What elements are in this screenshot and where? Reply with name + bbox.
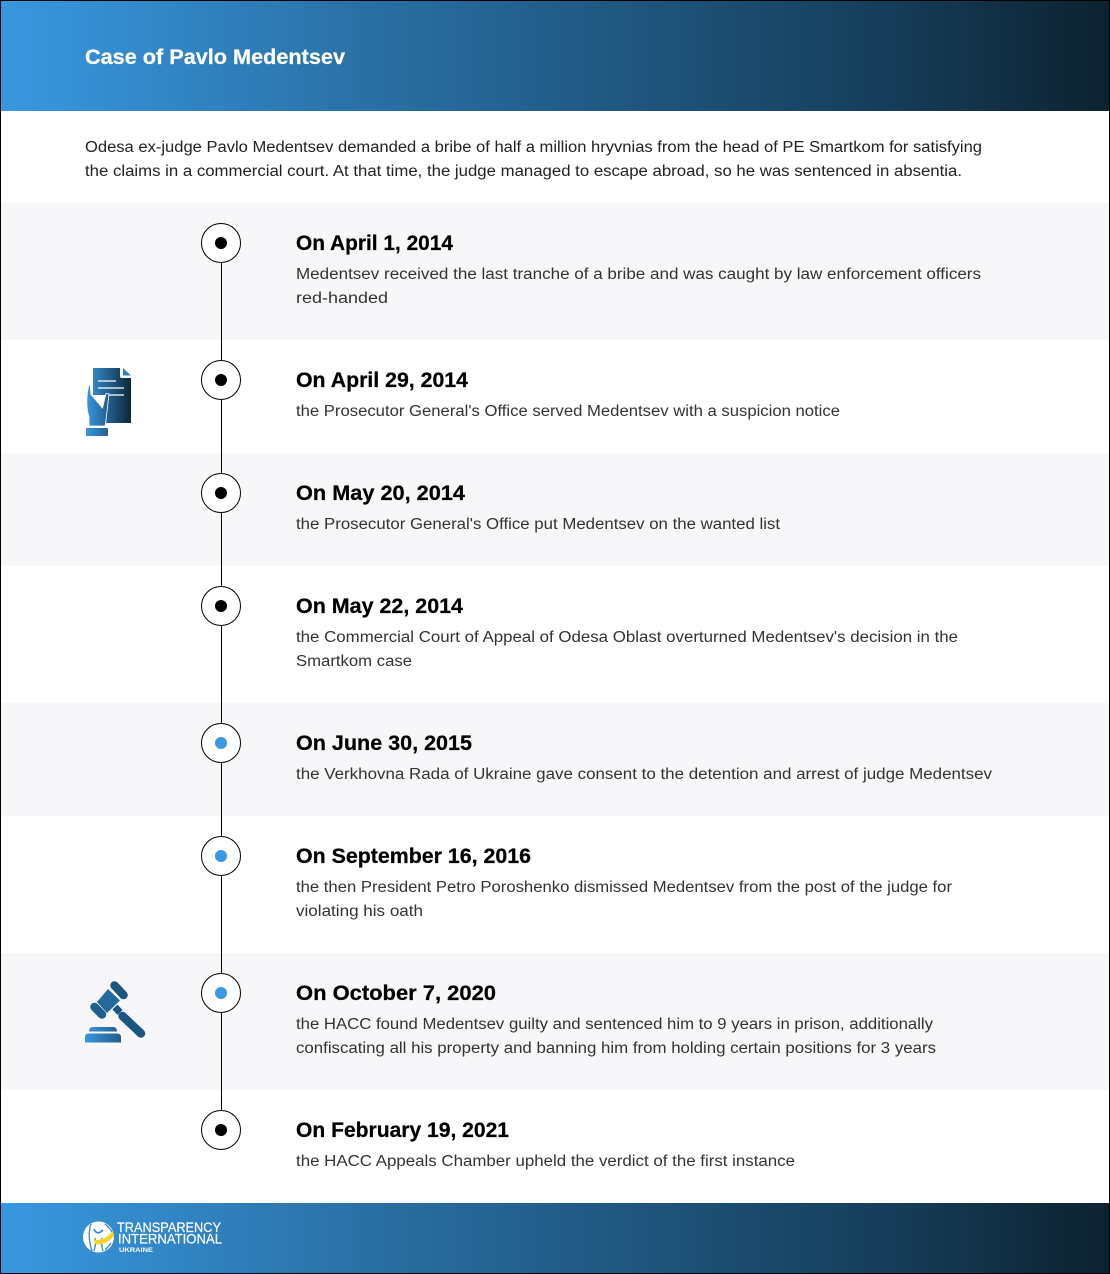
timeline event: February 19, 2021 xyxy=(202,1110,795,1170)
timeline event: May 20, 2014: On May 20, 2014 xyxy=(296,482,465,505)
text block: introduction xyxy=(85,139,982,180)
timeline event: September 16, 2016: violating his oath xyxy=(296,903,423,920)
timeline event: June 30, 2015: the Verkhovna Rada of Ukraine gave consent to the detention and arrest of judge Medentsev xyxy=(296,766,992,783)
timeline axis line xyxy=(220,243,222,1130)
title: Case of Pavlo Medentsev xyxy=(85,45,345,69)
timeline event: May 22, 2014: the Commercial Court of Appeal of Odesa Oblast overturned Medentsev's decision in the xyxy=(296,629,958,646)
timeline event: October 7, 2020: On October 7, 2020 xyxy=(296,982,496,1005)
timeline event: April 1, 2014 xyxy=(202,224,981,307)
panel: header band xyxy=(1,1,1109,111)
timeline event: September 16, 2016: On September 16, 2016 xyxy=(296,845,531,868)
timeline event: April 29, 2014 xyxy=(202,360,840,420)
logo: Transparency International Ukraine: TRANSPARENCY xyxy=(117,1219,222,1235)
timeline event: April 29, 2014: On April 29, 2014 xyxy=(296,369,468,392)
timeline event: September 16, 2016 xyxy=(202,836,952,920)
timeline event: May 20, 2014: the Prosecutor General's Office put Medentsev on the wanted list xyxy=(296,516,781,533)
text block: introduction: Odesa ex-judge Pavlo Medentsev demanded a bribe of half a million hryvnias from the head of PE Smartkom for satisfying xyxy=(85,139,982,156)
timeline event: May 22, 2014: Smartkom case xyxy=(296,653,412,670)
logo: Transparency International Ukraine: INTERNATIONAL xyxy=(118,1230,222,1246)
timeline event: April 1, 2014: red-handed xyxy=(296,290,388,307)
timeline event: February 19, 2021: the HACC Appeals Chamber upheld the verdict of the first instance xyxy=(296,1153,795,1170)
timeline event: May 22, 2014: On May 22, 2014 xyxy=(296,595,463,618)
panel: alternating row backgrounds xyxy=(1,203,1109,1090)
timeline event: October 7, 2020: confiscating all his property and banning him from holding certain positions for 3 years xyxy=(296,1040,936,1057)
timeline event: April 1, 2014: Medentsev received the last tranche of a bribe and was caught by law enforcement officers xyxy=(296,266,981,283)
timeline event: May 22, 2014 xyxy=(202,586,958,670)
timeline event: April 29, 2014: the Prosecutor General's Office served Medentsev with a suspicion notice xyxy=(296,403,840,420)
panel: footer band xyxy=(1,1203,1109,1273)
timeline event: October 7, 2020 xyxy=(202,974,936,1057)
icon: hand holding document xyxy=(86,368,131,436)
icon: judge gavel xyxy=(85,986,141,1042)
logo: Transparency International Ukraine: UKRAINE xyxy=(119,1247,154,1254)
logo: Transparency International Ukraine xyxy=(83,1219,222,1254)
timeline event: April 1, 2014: On April 1, 2014 xyxy=(296,232,453,255)
text block: introduction: the claims in a commercial court. At that time, the judge managed to escape abroad, so he was sentenced in absentia. xyxy=(85,163,962,180)
timeline event: May 20, 2014 xyxy=(202,474,781,533)
timeline event: June 30, 2015: On June 30, 2015 xyxy=(296,732,472,755)
timeline event: February 19, 2021: On February 19, 2021 xyxy=(296,1119,509,1142)
timeline event: June 30, 2015 xyxy=(202,724,992,783)
timeline event: October 7, 2020: the HACC found Medentsev guilty and sentenced him to 9 years in prison, additionally xyxy=(296,1016,933,1033)
timeline event: September 16, 2016: the then President Petro Poroshenko dismissed Medentsev from the post of the judge for xyxy=(296,879,952,896)
